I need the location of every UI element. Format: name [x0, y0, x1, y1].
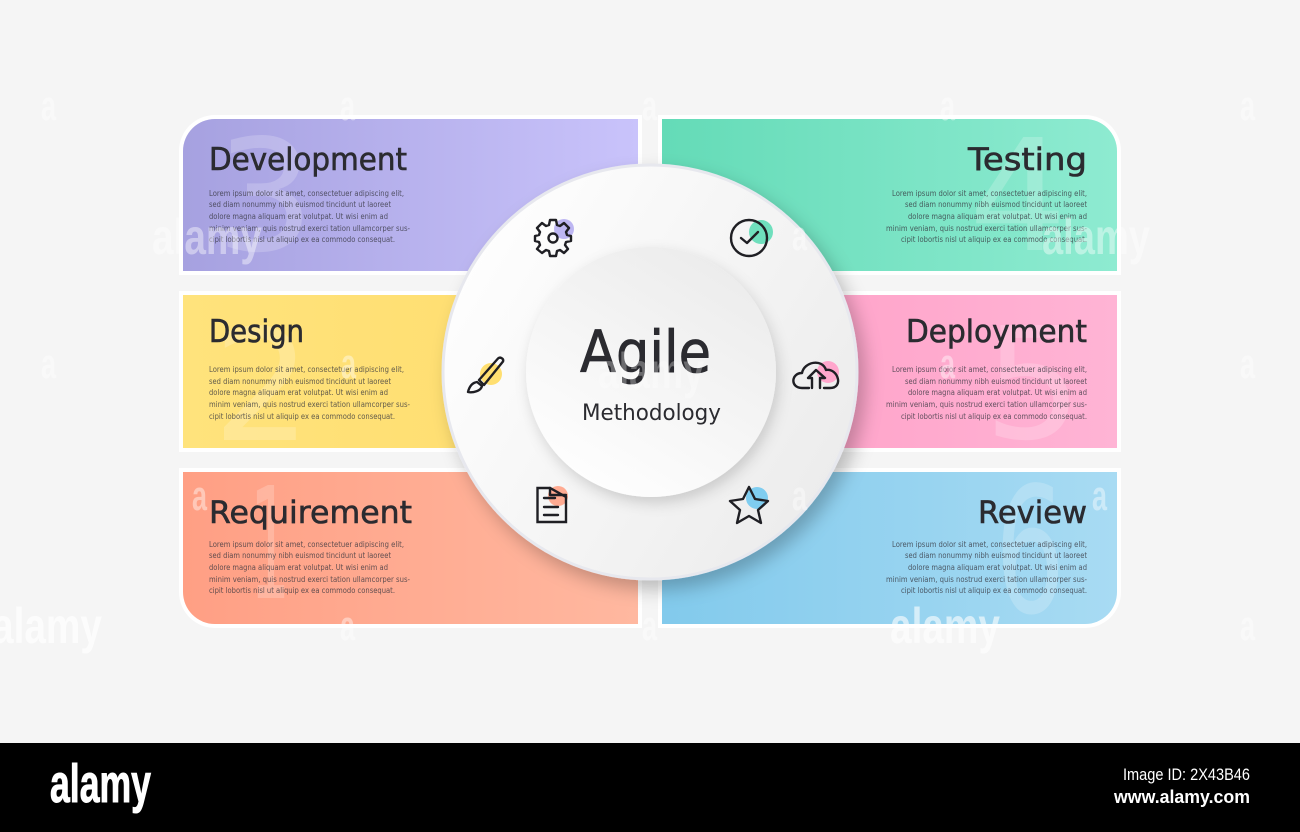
panel: requirement: minim veniam, quis nostrud exerci tation ullamcorper sus- [209, 575, 410, 584]
panel: review: dolore magna aliquam erat volutpat. Ut wisi enim ad [908, 563, 1087, 572]
panel: design: 2 [213, 296, 311, 477]
panel: requirement: cipit lobortis nisl ut aliquip ex ea commodo consequat. [209, 586, 395, 595]
panel: design [179, 291, 642, 477]
icon: check circle [731, 220, 773, 256]
watermark: a [1092, 472, 1107, 519]
watermark [0, 82, 1255, 654]
watermark: a [41, 82, 56, 129]
watermark: a [1240, 602, 1255, 649]
panel: testing: 4 [969, 106, 1067, 287]
watermark: alamy [1042, 209, 1150, 265]
footer band [0, 743, 1300, 832]
panel: testing: Lorem ipsum dolor sit amet, consectetuer adipiscing elit, [892, 189, 1087, 198]
panel: requirement: 1 [250, 454, 290, 635]
panel: design: cipit lobortis nisl ut aliquip ex ea commodo consequat. [209, 412, 395, 421]
footer image id: Image ID: 2X43B46 [1123, 765, 1250, 784]
panel: requirement: dolore magna aliquam erat volutpat. Ut wisi enim ad [209, 563, 388, 572]
panel: requirement [179, 454, 642, 635]
center title: Agile [580, 318, 711, 386]
panel: design: sed diam nonummy nibh euismod tincidunt ut laoreet [209, 377, 391, 386]
watermark: a [642, 602, 657, 649]
watermark: a [1240, 82, 1255, 129]
center title: Methodology [582, 401, 721, 426]
panel: development: Lorem ipsum dolor sit amet, consectetuer adipiscing elit, [209, 189, 404, 198]
panel: testing: Testing [967, 142, 1087, 178]
panel: requirement: sed diam nonummy nibh euismod tincidunt ut laoreet [209, 551, 391, 560]
watermark: alamy [598, 343, 704, 399]
icon: paint brush [468, 358, 503, 392]
panel: deployment: dolore magna aliquam erat volutpat. Ut wisi enim ad [908, 388, 1087, 397]
panel: testing: cipit lobortis nisl ut aliquip ex ea commodo consequat. [901, 235, 1087, 244]
watermark: alamy [890, 598, 1000, 654]
panel: deployment [658, 291, 1121, 475]
outer circle [443, 165, 857, 579]
watermark: a [41, 340, 56, 387]
panel: testing: minim veniam, quis nostrud exerci tation ullamcorper sus- [886, 224, 1087, 233]
panel: review [658, 451, 1121, 654]
panel: development: cipit lobortis nisl ut aliquip ex ea commodo consequat. [209, 235, 395, 244]
panel: design: dolore magna aliquam erat volutpat. Ut wisi enim ad [209, 388, 388, 397]
watermark: alamy [152, 209, 262, 265]
center title [580, 318, 721, 426]
panel: deployment: cipit lobortis nisl ut aliquip ex ea commodo consequat. [901, 412, 1087, 421]
watermark: a [1240, 340, 1255, 387]
panel: development [179, 106, 642, 287]
panel: design: minim veniam, quis nostrud exerci tation ullamcorper sus- [209, 400, 410, 409]
panel: design: Design [209, 314, 304, 350]
watermark: a [642, 82, 657, 129]
panel: development: dolore magna aliquam erat volutpat. Ut wisi enim ad [209, 212, 388, 221]
panel: testing: sed diam nonummy nibh euismod tincidunt ut laoreet [905, 200, 1087, 209]
panel: design: Lorem ipsum dolor sit amet, consectetuer adipiscing elit, [209, 365, 404, 374]
panel: development: Development [209, 142, 407, 178]
watermark: a [792, 212, 807, 259]
panel: deployment: Lorem ipsum dolor sit amet, consectetuer adipiscing elit, [892, 365, 1087, 374]
watermark: a [340, 602, 355, 649]
panel: requirement: Lorem ipsum dolor sit amet, consectetuer adipiscing elit, [209, 540, 404, 549]
panel: review: Lorem ipsum dolor sit amet, consectetuer adipiscing elit, [892, 540, 1087, 549]
icon: document [538, 486, 568, 522]
panel: review: Review [978, 495, 1087, 531]
panel: review: sed diam nonummy nibh euismod tincidunt ut laoreet [905, 551, 1087, 560]
panel: review: minim veniam, quis nostrud exerci tation ullamcorper sus- [886, 575, 1087, 584]
panel: deployment: 5 [984, 294, 1082, 475]
panel: testing: dolore magna aliquam erat volutpat. Ut wisi enim ad [908, 212, 1087, 221]
panel: review: 6 [995, 451, 1065, 654]
panel: review: cipit lobortis nisl ut aliquip ex ea commodo consequat. [901, 586, 1087, 595]
panel: development: 3 [216, 106, 314, 287]
panel: deployment: minim veniam, quis nostrud exerci tation ullamcorper sus- [886, 400, 1087, 409]
icon: gear [535, 219, 574, 256]
footer url: www.alamy.com [1113, 787, 1250, 807]
panel: requirement: Requirement [209, 495, 412, 531]
watermark: a [340, 82, 355, 129]
watermark: a [940, 82, 955, 129]
panel: development: minim veniam, quis nostrud exerci tation ullamcorper sus- [209, 224, 410, 233]
panel: development: sed diam nonummy nibh euismod tincidunt ut laoreet [209, 200, 391, 209]
watermark: a [792, 472, 807, 519]
watermark: a [192, 472, 207, 519]
panel: deployment: sed diam nonummy nibh euismod tincidunt ut laoreet [905, 377, 1087, 386]
footer logo: alamy [50, 754, 151, 814]
watermark: a [341, 340, 356, 387]
icon: cloud upload [793, 361, 839, 388]
icon: star [730, 487, 768, 523]
inner circle [526, 247, 776, 497]
watermark: a [940, 340, 955, 387]
panel: testing [658, 106, 1121, 287]
panel: deployment: Deployment [906, 314, 1087, 350]
